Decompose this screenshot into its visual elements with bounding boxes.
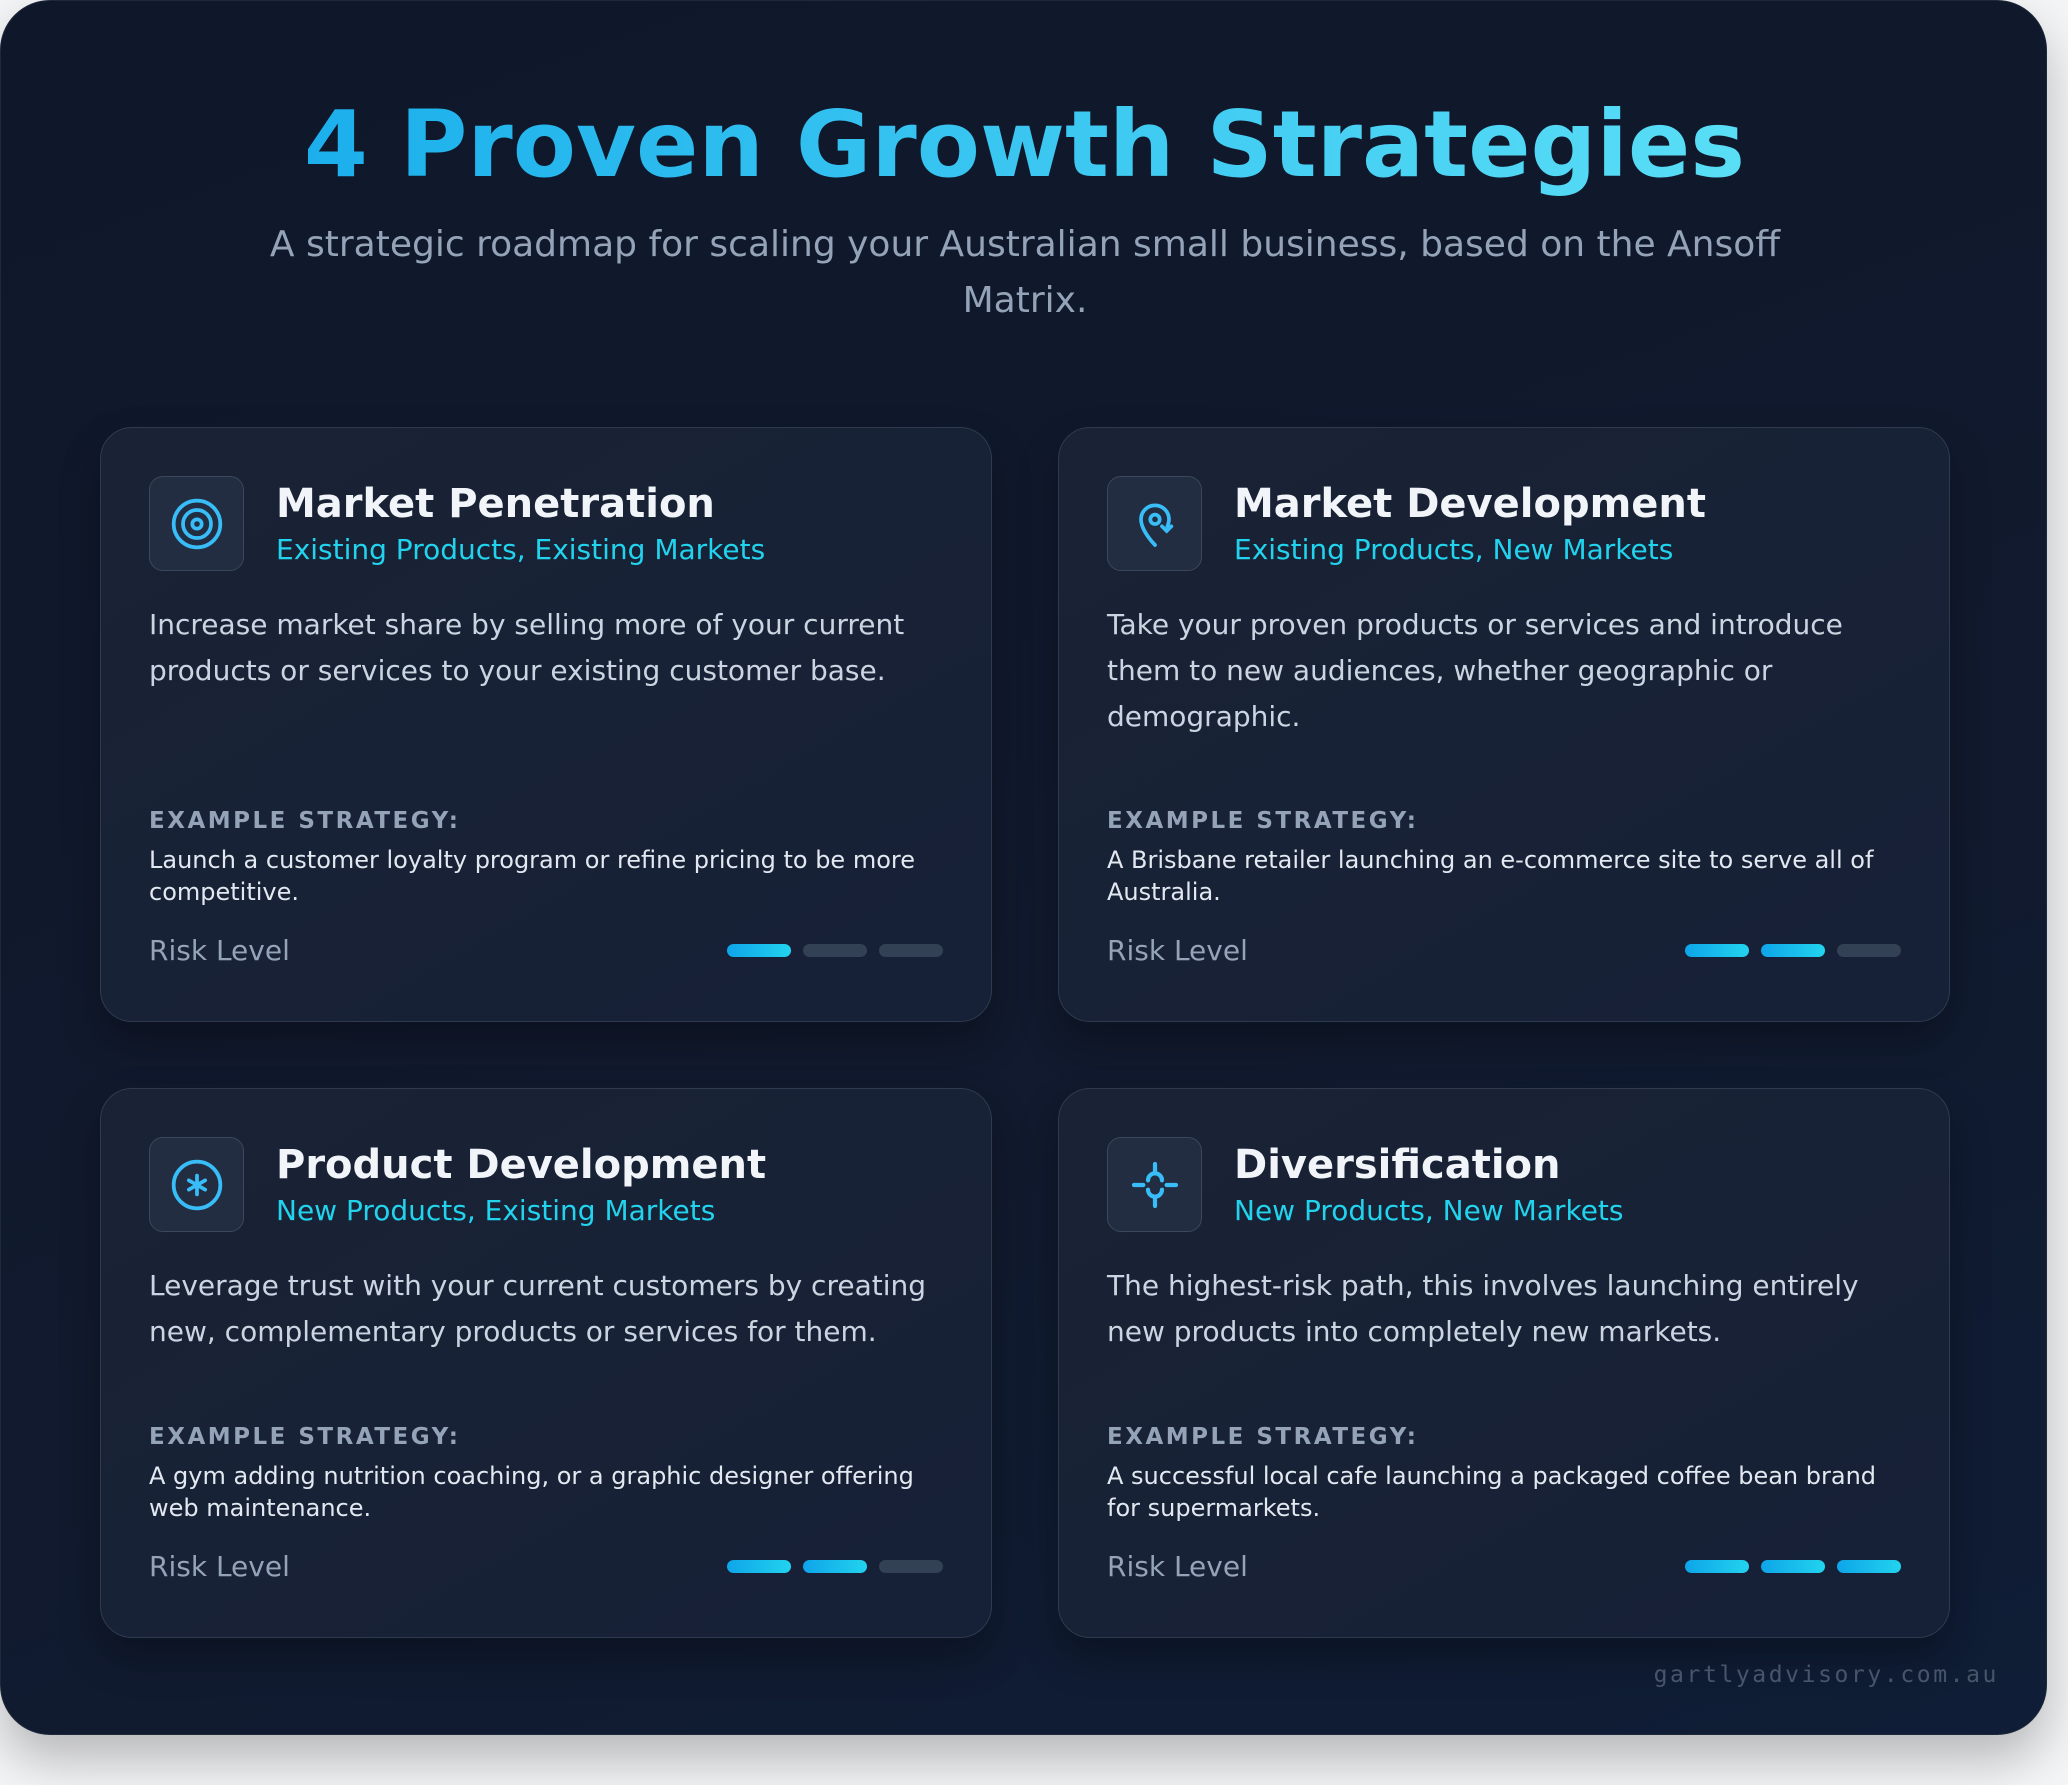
header: New Products, Existing Markets <box>276 1194 715 1227</box>
header: Existing Products, New Markets <box>1234 533 1673 566</box>
header: Diversification <box>1234 1142 1561 1188</box>
example strategy: A successful local cafe launching a packaged coffee bean brand for supermarkets. <box>1107 1462 1876 1522</box>
panel: market development <box>1058 427 1950 1022</box>
icon: map pin <box>1107 476 1202 571</box>
example strategy: EXAMPLE STRATEGY: <box>149 1424 460 1450</box>
risk level <box>149 934 943 966</box>
title: 4 Proven Growth Strategies <box>304 91 1745 198</box>
description: Increase market share by selling more of your current products or services to your existing customer base. <box>149 608 904 687</box>
header: Existing Products, Existing Markets <box>276 533 765 566</box>
example strategy: Launch a customer loyalty program or refine pricing to be more competitive. <box>149 846 915 906</box>
header <box>149 1137 766 1232</box>
example strategy <box>1107 808 1874 906</box>
risk level: Risk Level <box>1107 934 1248 966</box>
icon: target <box>149 476 244 571</box>
icon: crosshair <box>1107 1137 1202 1232</box>
header <box>149 476 765 571</box>
header: Market Penetration <box>276 481 715 527</box>
risk level: Risk Level <box>149 934 290 966</box>
example strategy <box>1107 1424 1876 1522</box>
description: Take your proven products or services and introduce them to new audiences, whether geographic or demographic. <box>1107 608 1843 733</box>
panel: diversification <box>1058 1088 1950 1638</box>
example strategy <box>149 808 915 906</box>
title <box>1 85 2048 205</box>
risk level <box>1107 1550 1901 1582</box>
risk level <box>1107 934 1901 966</box>
header: Market Development <box>1234 481 1706 527</box>
panel: market penetration <box>100 427 992 1022</box>
header: Product Development <box>276 1142 766 1188</box>
example strategy: EXAMPLE STRATEGY: <box>1107 1424 1418 1450</box>
risk level <box>149 1550 943 1582</box>
subtitle: A strategic roadmap for scaling your Australian small business, based on the Ansoff Matrix. <box>270 224 1780 321</box>
header: New Products, New Markets <box>1234 1194 1623 1227</box>
risk level: Risk Level <box>149 1550 290 1582</box>
example strategy: EXAMPLE STRATEGY: <box>1107 808 1418 834</box>
example strategy: A Brisbane retailer launching an e-commerce site to serve all of Australia. <box>1107 846 1873 906</box>
example strategy: EXAMPLE STRATEGY: <box>149 808 460 834</box>
description: The highest-risk path, this involves launching entirely new products into completely new markets. <box>1107 1269 1859 1348</box>
example strategy <box>149 1424 914 1522</box>
header <box>1107 1137 1623 1232</box>
risk level: Risk Level <box>1107 1550 1248 1582</box>
icon: sparkle circle <box>149 1137 244 1232</box>
footer url: gartlyadvisory.com.au <box>1654 1662 1999 1688</box>
panel: product development <box>100 1088 992 1638</box>
description: Leverage trust with your current customers by creating new, complementary products or services for them. <box>149 1269 926 1348</box>
header <box>1107 476 1706 571</box>
example strategy: A gym adding nutrition coaching, or a graphic designer offering web maintenance. <box>149 1462 914 1522</box>
